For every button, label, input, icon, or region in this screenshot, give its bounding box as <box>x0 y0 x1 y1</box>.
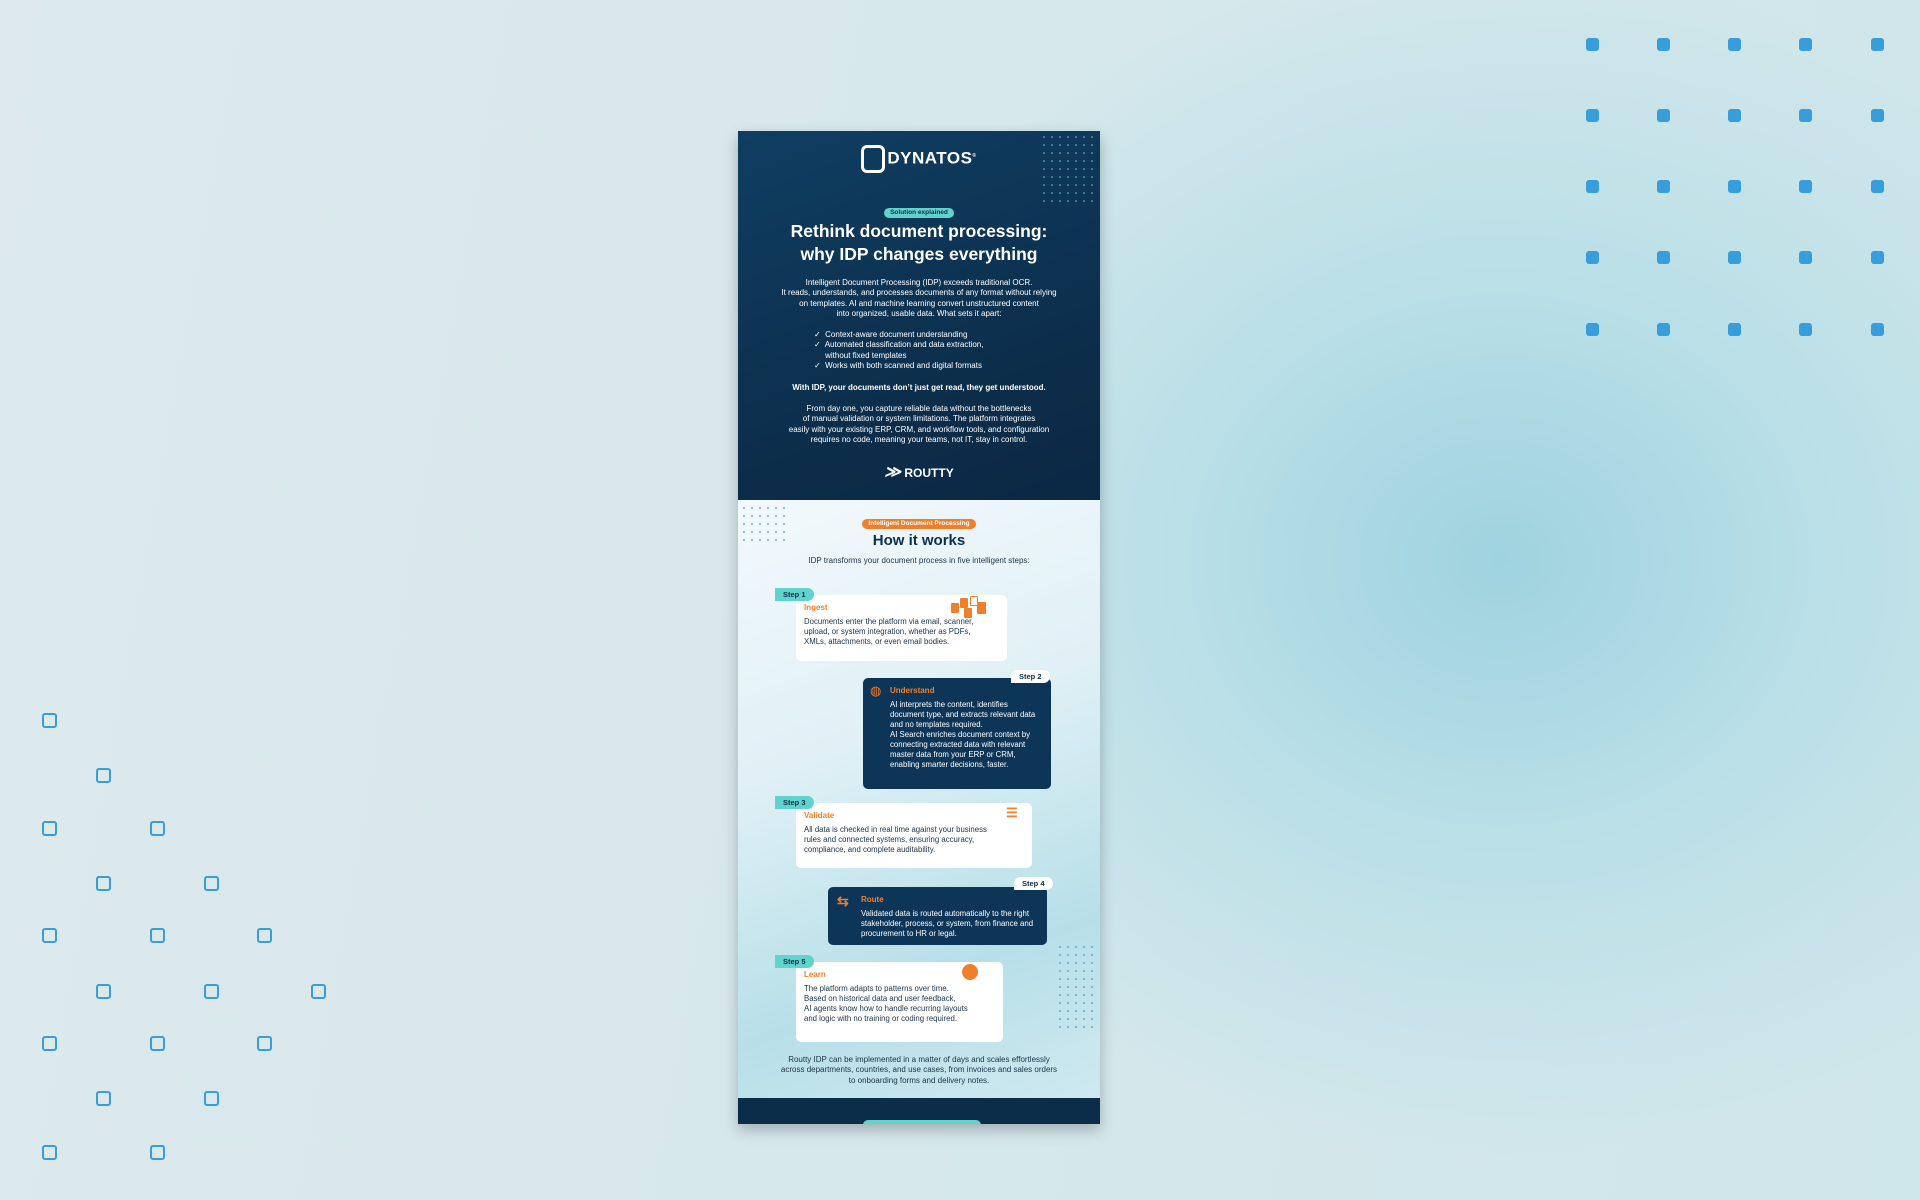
checklist: ✓ Context-aware document understanding <box>814 330 967 339</box>
step 2: AI Search enriches document context by connecting extracted data with relevant master data from your ERP or CRM, enabling smarter decisions, faster. <box>890 730 1030 769</box>
bold statement: With IDP, your documents don’t just get read, they get understood. <box>792 383 1046 392</box>
icon: documents <box>951 596 986 618</box>
step 3: rules and connected systems, ensuring accuracy, <box>804 835 974 844</box>
panel: bottom dark band <box>738 1098 1100 1128</box>
step 5: and logic with no training or coding required. <box>804 1014 957 1023</box>
step 1: XMLs, attachments, or even email bodies. <box>804 637 949 646</box>
subtitle: IDP transforms your document process in five intelligent steps: <box>808 556 1030 565</box>
step 1: Documents enter the platform via email, scanner, <box>804 617 973 626</box>
step 3: ☰ <box>1006 805 1018 820</box>
step 2: ◍ <box>870 683 881 698</box>
step 3: Step 3 <box>783 798 806 807</box>
step 1 <box>775 588 1007 661</box>
checklist <box>814 330 983 370</box>
closing paragraph: of manual validation or system limitations. The platform integrates <box>803 414 1035 423</box>
title <box>791 221 1047 264</box>
decorative square grid bottom left <box>42 713 326 1160</box>
intro text: Intelligent Document Processing (IDP) exceeds traditional OCR. <box>806 278 1032 287</box>
panel: dark header <box>738 131 1100 500</box>
step 2 <box>863 670 1051 789</box>
step 5: Step 5 <box>783 957 806 966</box>
closing paragraph <box>789 404 1049 444</box>
closing text: to onboarding forms and delivery notes. <box>849 1076 989 1085</box>
step 4: Step 4 <box>1022 879 1045 888</box>
intro text: into organized, usable data. What sets it apart: <box>836 309 1001 318</box>
closing paragraph: From day one, you capture reliable data without the bottlenecks <box>806 404 1032 413</box>
decorative dot grid top right <box>1586 38 1884 336</box>
title: why IDP changes everything <box>800 244 1037 264</box>
intro text: It reads, understands, and processes documents of any format without relying <box>781 288 1057 297</box>
step 5: AI agents know how to handle recurring layouts <box>804 1004 968 1013</box>
checklist: ✓ Automated classification and data extraction, <box>814 340 983 349</box>
step 1: Step 1 <box>783 590 806 599</box>
step 4 <box>828 877 1053 945</box>
closing text: Routty IDP can be implemented in a matter of days and scales effortlessly <box>788 1055 1050 1064</box>
intro text: on templates. AI and machine learning convert unstructured content <box>799 299 1039 308</box>
pill: solution explained: Solution explained <box>890 209 948 216</box>
checklist: ✓ Works with both scanned and digital formats <box>814 361 982 370</box>
pill: intelligent document processing: Intelligent Document Processing <box>868 520 970 527</box>
step 2: Step 2 <box>1019 672 1042 681</box>
step 3 <box>775 796 1032 868</box>
step 5: The platform adapts to patterns over time. <box>804 984 949 993</box>
step 1: upload, or system integration, whether as PDFs, <box>804 627 970 636</box>
step 4: Route <box>861 895 884 904</box>
step 3: compliance, and complete auditability. <box>804 845 935 854</box>
step 5: Learn <box>804 970 826 979</box>
panel: how it works <box>738 500 1100 1098</box>
checklist: without fixed templates <box>825 351 906 360</box>
step 2: Understand <box>890 686 934 695</box>
step 3: Validate <box>804 811 834 820</box>
closing paragraph: easily with your existing ERP, CRM, and workflow tools, and configuration <box>789 425 1049 434</box>
logo: Dynatos: DYNATOS® <box>887 148 977 167</box>
heading: How it works <box>873 532 965 549</box>
step 4: ⇆ <box>837 893 849 909</box>
logo: Routty: ≫ ROUTTY <box>884 464 954 481</box>
step 5 <box>775 955 1003 1042</box>
closing text <box>781 1055 1057 1085</box>
closing text: across departments, countries, and use cases, from invoices and sales orders <box>781 1065 1057 1074</box>
infographic document <box>738 131 1100 1124</box>
step 3: All data is checked in real time against your business <box>804 825 987 834</box>
title: Rethink document processing: <box>791 221 1047 241</box>
step 5: Based on historical data and user feedback, <box>804 994 956 1003</box>
logo: Dynatos <box>861 145 977 173</box>
step 1: Ingest <box>804 603 828 612</box>
step 2: AI interprets the content, identifies document type, and extracts relevant data and no templates required. <box>890 700 1035 729</box>
step 4: Validated data is routed automatically to the right stakeholder, process, or system, from finance and procurement to HR or legal. <box>861 909 1033 938</box>
closing paragraph: requires no code, meaning your teams, not IT, stay in control. <box>811 435 1027 444</box>
intro text <box>781 278 1057 318</box>
